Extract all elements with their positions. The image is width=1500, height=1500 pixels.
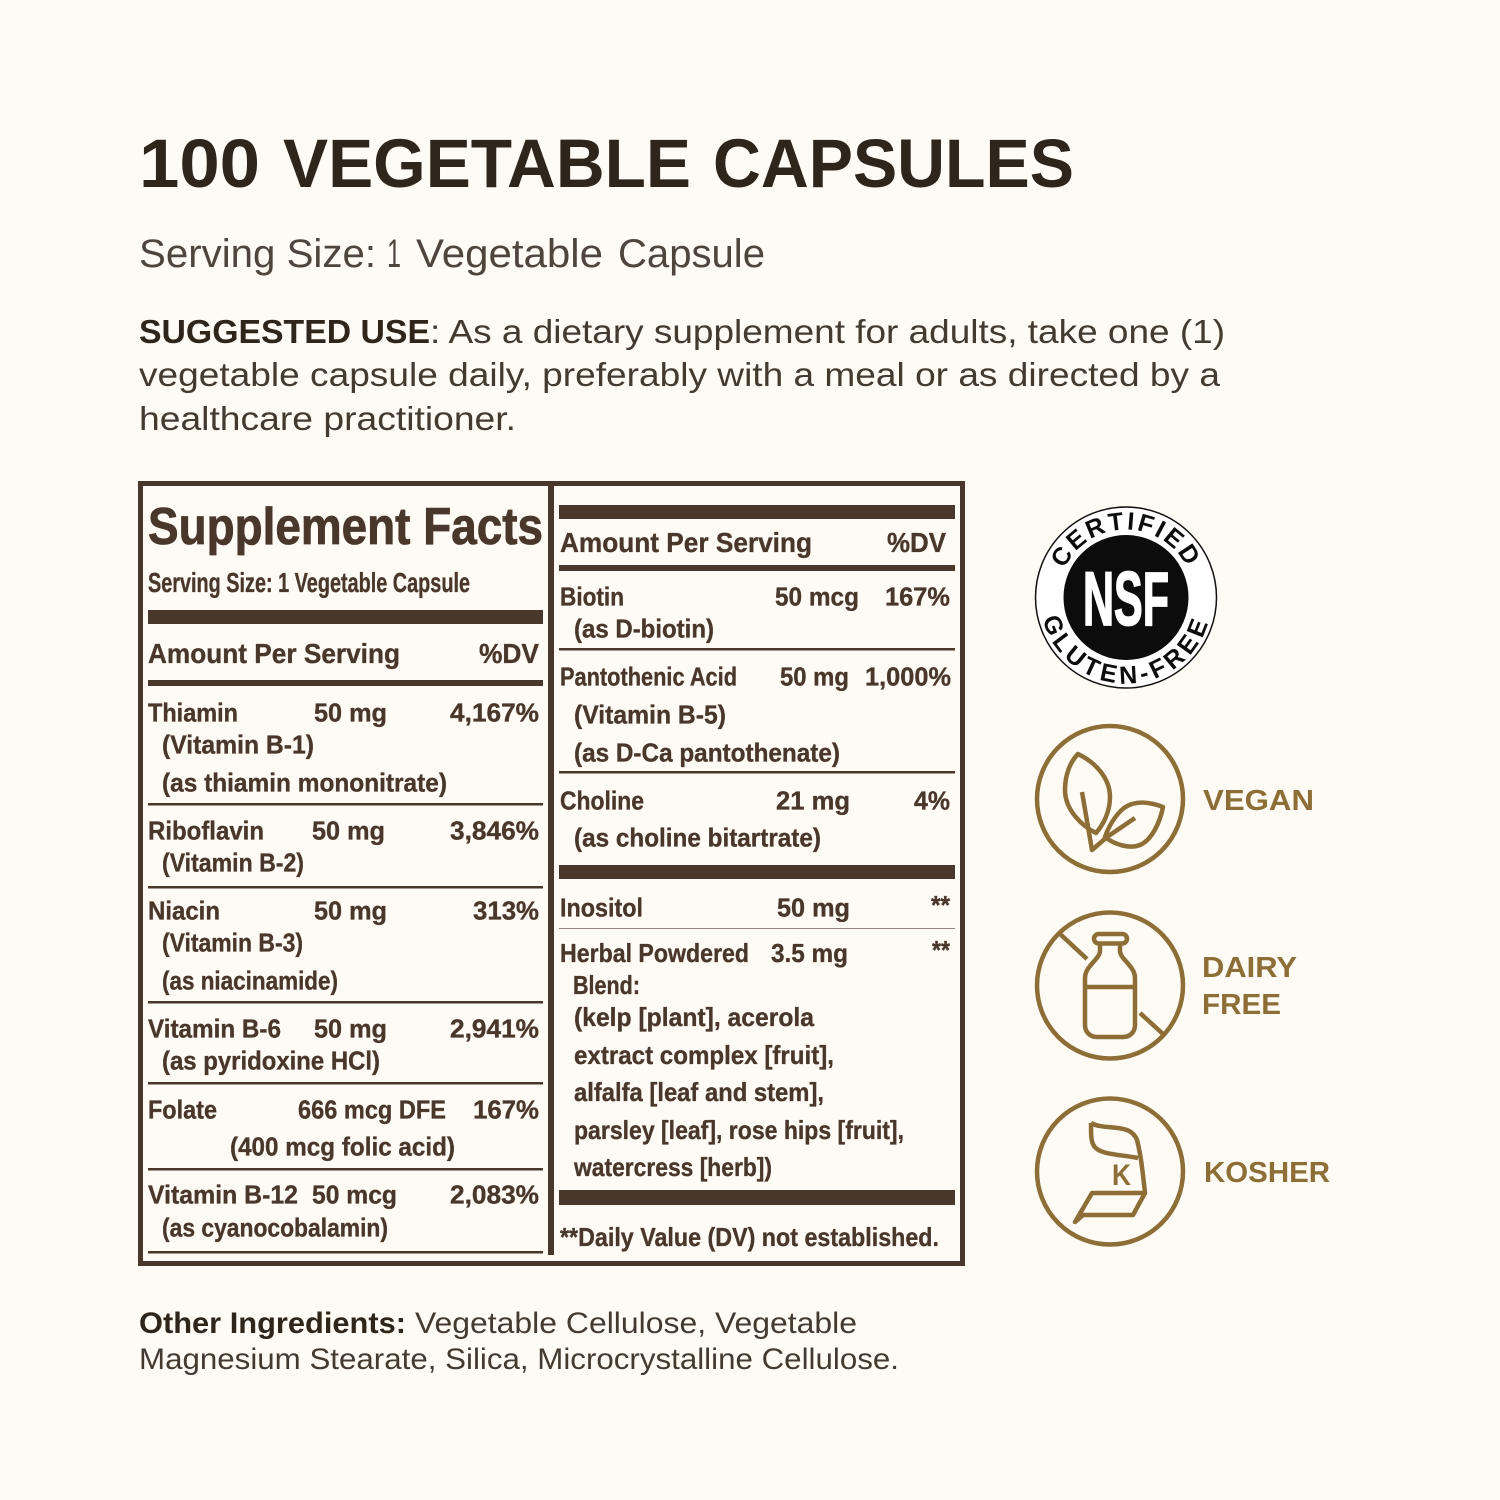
row: folate: Folate (148, 1094, 217, 1124)
suggested use text block: vegetable capsule daily, preferably with a meal or as directed by a (139, 356, 1221, 393)
right column header: Amount Per Serving (560, 527, 812, 558)
row: biotin: (as D-biotin) (574, 614, 714, 644)
suggested use text block: SUGGESTED USE (139, 313, 430, 350)
left column header: Amount Per Serving (148, 638, 400, 669)
row: thiamin: Thiamin (148, 698, 238, 728)
row: choline: (as choline bitartrate) (574, 822, 821, 852)
row: riboflavin: (Vitamin B-2) (162, 848, 304, 878)
row: inositol: ** (931, 890, 951, 920)
icon: vegan leaves (1037, 726, 1183, 872)
row: herbal powdered blend: 3.5 mg (771, 938, 848, 968)
row: vitamin b-12: Vitamin B-12 (148, 1180, 298, 1210)
other ingredients text block: Other Ingredients: (139, 1307, 406, 1340)
left column header: %DV (479, 638, 539, 669)
row: vitamin b-12: (as cyanocobalamin) (162, 1212, 388, 1242)
right column header: %DV (887, 527, 946, 558)
row: pantothenic acid: 50 mg (780, 662, 849, 692)
suggested use text block (139, 313, 1225, 437)
row: folate: 167% (473, 1094, 539, 1124)
row: niacin: (Vitamin B-3) (162, 928, 303, 958)
right column header (560, 527, 946, 558)
icon: kosher symbol (1037, 1098, 1183, 1244)
row: vitamin b-6: (as pyridoxine HCl) (162, 1046, 380, 1076)
serving size line: Serving Size: (139, 232, 376, 276)
row: thiamin: 4,167% (450, 698, 539, 728)
label: dairy free: FREE (1202, 989, 1281, 1021)
daily value footnote: **Daily Value (DV) not established. (560, 1222, 939, 1252)
suggested use text block: healthcare practitioner. (139, 400, 516, 437)
suggested use text block: : As a dietary supplement for adults, take one (1) (430, 313, 1225, 350)
row: herbal powdered blend: Blend: (573, 970, 640, 1000)
row: herbal powdered blend: parsley [leaf], rose hips [fruit], (574, 1115, 904, 1145)
row: folate: 666 mcg DFE (298, 1094, 446, 1124)
icon: NSF certified gluten-free badge (1034, 506, 1218, 689)
row: biotin: Biotin (560, 582, 624, 612)
row: vitamin b-12: 2,083% (450, 1180, 539, 1210)
row: herbal powdered blend: ** (932, 935, 951, 965)
icon: NSF certified gluten-free badge: CERTIFIED (1052, 512, 1198, 565)
icon: NSF certified gluten-free badge: GLUTEN-FREE (1044, 616, 1208, 684)
supplement facts heading: Supplement Facts (148, 498, 543, 556)
row: vitamin b-6 (148, 1014, 539, 1076)
row: herbal powdered blend: (kelp [plant], acerola (574, 1002, 815, 1032)
row: riboflavin (148, 816, 539, 878)
left column (148, 498, 543, 1254)
label: kosher: KOSHER (1204, 1157, 1330, 1189)
row: folate (148, 1094, 539, 1162)
row: herbal powdered blend (560, 935, 951, 1182)
row: niacin (148, 896, 539, 996)
row: vitamin b-6: 2,941% (450, 1014, 539, 1044)
row: vitamin b-12 (148, 1180, 539, 1242)
row: herbal powdered blend: alfalfa [leaf and stem], (574, 1077, 824, 1107)
other ingredients text block: Vegetable Cellulose, Vegetable (415, 1307, 857, 1340)
other ingredients text block: Magnesium Stearate, Silica, Microcrystalline Cellulose. (139, 1343, 899, 1376)
title: CAPSULES (713, 125, 1074, 202)
row: pantothenic acid (560, 662, 951, 768)
panel serving size: Serving Size: 1 Vegetable Capsule (148, 567, 470, 598)
other ingredients text block (139, 1307, 899, 1376)
title (139, 125, 1074, 202)
row: niacin: 50 mg (314, 896, 387, 926)
row: choline: 4% (914, 786, 950, 816)
row: choline: 21 mg (776, 786, 850, 816)
title: VEGETABLE (283, 125, 691, 202)
label: dairy free: DAIRY (1202, 952, 1297, 984)
row: pantothenic acid: (Vitamin B-5) (574, 700, 726, 730)
icon: dairy free bottle (1037, 912, 1183, 1058)
row: herbal powdered blend: extract complex [fruit], (574, 1040, 834, 1070)
row: biotin: 50 mcg (775, 582, 859, 612)
panel: supplement facts (140, 484, 962, 1264)
row: thiamin: 50 mg (314, 698, 387, 728)
row: folate: (400 mcg folic acid) (230, 1132, 455, 1162)
icon: NSF certified gluten-free badge: NSF (1083, 557, 1169, 642)
row: riboflavin: 50 mg (312, 816, 385, 846)
row: pantothenic acid: 1,000% (865, 662, 951, 692)
serving size line: Capsule (618, 232, 765, 276)
row: inositol (560, 890, 951, 922)
row: choline (560, 786, 950, 852)
label: dairy free (1202, 952, 1297, 1021)
row: niacin: 313% (473, 896, 539, 926)
row: niacin: (as niacinamide) (162, 966, 338, 996)
row: herbal powdered blend: Herbal Powdered (560, 938, 749, 968)
left column header (148, 638, 539, 669)
row: vitamin b-12: 50 mcg (312, 1180, 397, 1210)
title: 100 (139, 125, 260, 202)
row: niacin: Niacin (148, 896, 220, 926)
row: biotin: 167% (885, 582, 950, 612)
serving size line: Vegetable (416, 232, 603, 276)
row: inositol: Inositol (560, 892, 643, 922)
row: biotin (560, 582, 950, 644)
row: riboflavin: Riboflavin (148, 816, 264, 846)
row: vitamin b-6: 50 mg (314, 1014, 387, 1044)
row: inositol: 50 mg (777, 892, 850, 922)
row: choline: Choline (560, 786, 644, 816)
row: thiamin: (Vitamin B-1) (162, 730, 314, 760)
row: herbal powdered blend: watercress [herb]) (573, 1152, 772, 1182)
row: pantothenic acid: Pantothenic Acid (560, 662, 737, 692)
row: riboflavin: 3,846% (450, 816, 539, 846)
serving size line: 1 (387, 232, 401, 276)
row: vitamin b-6: Vitamin B-6 (148, 1014, 281, 1044)
serving size line (139, 232, 765, 276)
right column (559, 505, 955, 1252)
icon: kosher symbol: K (1112, 1159, 1131, 1192)
label: vegan: VEGAN (1203, 785, 1314, 817)
row: pantothenic acid: (as D-Ca pantothenate) (574, 738, 840, 768)
row: thiamin: (as thiamin mononitrate) (162, 768, 447, 798)
row: thiamin (148, 698, 539, 798)
